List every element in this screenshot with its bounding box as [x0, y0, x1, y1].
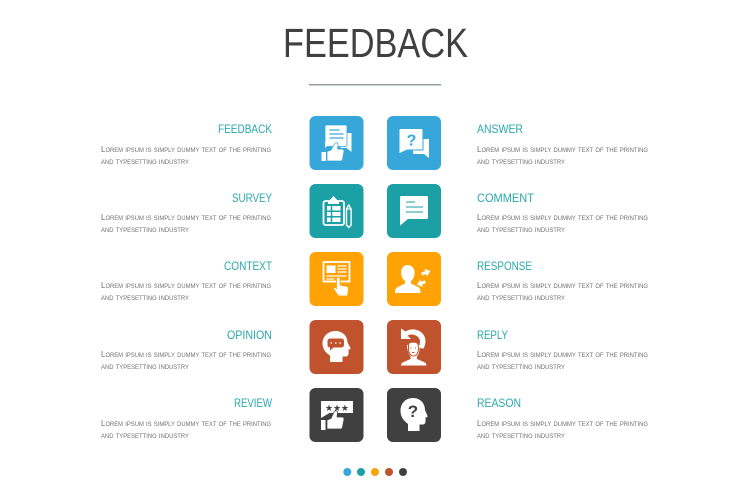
icon: survey clipboard and pencil [310, 184, 364, 238]
pagination dots [343, 468, 407, 476]
text block: opinion [101, 328, 272, 371]
icon: review stars and thumb: ★★★ [325, 403, 349, 413]
text block: context: and typesetting industry [101, 293, 189, 302]
icon: comment speech bubble [387, 184, 441, 238]
text block: answer: Lorem ipsum is simply dummy text of the printing [477, 145, 648, 154]
text block: survey: SURVEY [232, 191, 272, 205]
text block: answer: ANSWER [477, 122, 523, 136]
text block: feedback: Lorem ipsum is simply dummy text of the printing [101, 145, 271, 154]
text block: survey: and typesetting industry [101, 225, 189, 234]
text block: reply: REPLY [477, 328, 508, 342]
text block: opinion: and typesetting industry [101, 362, 189, 371]
icon: response person with arrows [387, 252, 441, 306]
text block: reply [477, 328, 648, 371]
text block: reply: Lorem ipsum is simply dummy text of the printing [477, 350, 648, 359]
icon: reply person with return arrow [387, 320, 441, 374]
text block: feedback: and typesetting industry [101, 157, 189, 166]
text block: comment [477, 191, 648, 234]
text block: comment: and typesetting industry [477, 225, 565, 234]
text block: response: and typesetting industry [477, 293, 565, 302]
text block: reason [477, 396, 648, 440]
text block: review: REVIEW [234, 396, 273, 410]
text block: survey: Lorem ipsum is simply dummy text of the printing [101, 213, 271, 222]
text block: reason: and typesetting industry [477, 431, 565, 440]
text block: review: and typesetting industry [101, 431, 189, 440]
text block: response: RESPONSE [477, 259, 532, 273]
text block: response: Lorem ipsum is simply dummy text of the printing [477, 281, 648, 290]
text block: feedback: FEEDBACK [218, 122, 272, 136]
text block: comment: COMMENT [477, 191, 535, 205]
icon: reason head with question mark: ? [408, 402, 418, 421]
icon: opinion head with thought bubble [310, 320, 364, 374]
text block: feedback [101, 122, 272, 166]
text block: opinion: OPINION [227, 328, 272, 342]
text block: response [477, 259, 648, 302]
title: FEEDBACK [283, 20, 468, 66]
text block: context: Lorem ipsum is simply dummy text of the printing [101, 281, 271, 290]
text block: context [101, 259, 273, 302]
icon: reason head with question mark [387, 388, 441, 442]
icon: answer question bubbles [387, 116, 441, 170]
text block: survey [101, 191, 272, 234]
icon: answer question bubbles: ? [407, 132, 416, 150]
text block: answer [477, 122, 648, 166]
text block: comment: Lorem ipsum is simply dummy text of the printing [477, 213, 648, 222]
icon: feedback document and thumb [310, 116, 364, 170]
icon: context screen and hand [310, 252, 364, 306]
icon: review stars and thumb [310, 388, 364, 442]
text block: reason: REASON [477, 396, 521, 410]
text block: answer: and typesetting industry [477, 157, 565, 166]
text block: review: Lorem ipsum is simply dummy text of the printing [101, 419, 271, 428]
text block: opinion: Lorem ipsum is simply dummy text of the printing [101, 350, 271, 359]
text block: reason: Lorem ipsum is simply dummy text of the printing [477, 419, 648, 428]
text block: reply: and typesetting industry [477, 362, 565, 371]
text block: review [101, 396, 273, 440]
text block: context: CONTEXT [224, 259, 273, 273]
